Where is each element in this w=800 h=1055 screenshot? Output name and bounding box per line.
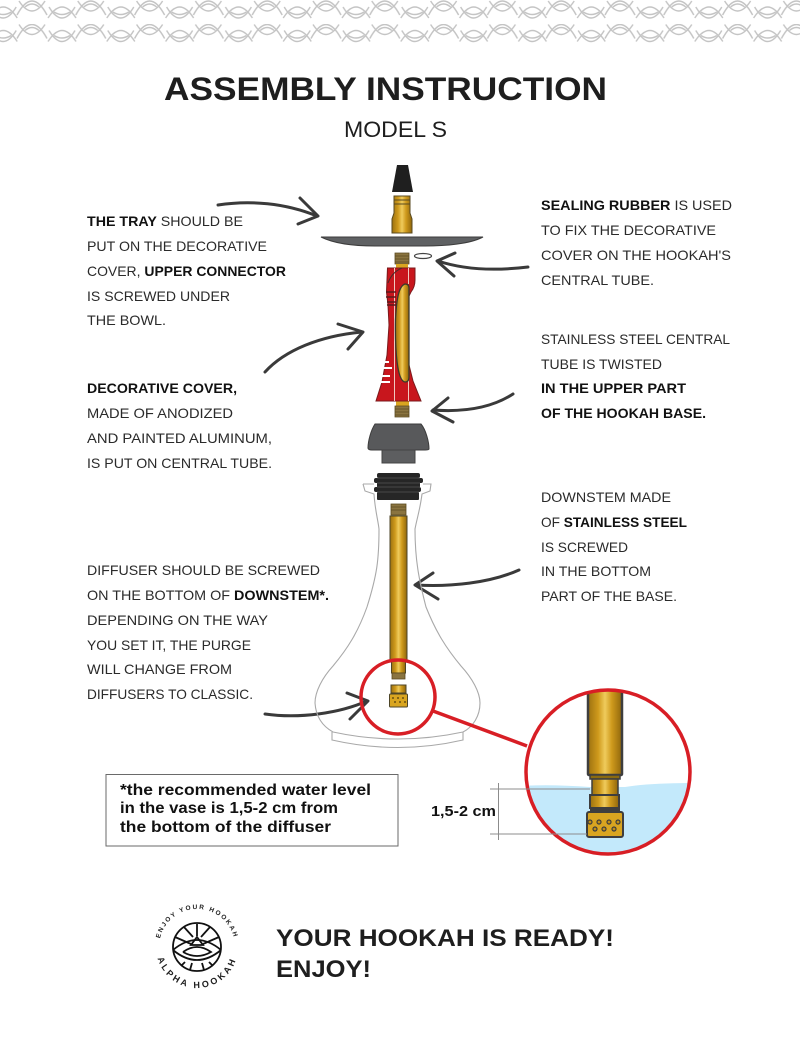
note box: the bottom of the diffuser (120, 819, 331, 836)
text block: downstem: PART OF THE BASE. (541, 588, 677, 604)
text block: diffuser: WILL CHANGE FROM (87, 661, 232, 677)
text block: the tray: IS SCREWED UNDER (87, 288, 230, 304)
text block: the tray: THE BOWL. (87, 312, 166, 328)
background pattern band (0, 0, 800, 43)
text block: central tube: STAINLESS STEEL CENTRAL (541, 331, 730, 347)
text block: diffuser: YOU SET IT, THE PURGE (87, 637, 251, 653)
small red circle (361, 660, 435, 734)
measure lines (490, 783, 590, 840)
closing message: YOUR HOOKAH IS READY! (276, 925, 614, 952)
hookah diagram (315, 165, 483, 748)
decorative cover with threads (376, 253, 421, 417)
text block: central tube: OF THE HOOKAH BASE. (541, 405, 706, 421)
diffuser (390, 685, 408, 707)
text block: decorative cover: AND PAINTED ALUMINUM, (87, 430, 272, 446)
text block: diffuser: DIFFUSERS TO CLASSIC. (87, 686, 253, 702)
text block: the tray (87, 213, 286, 328)
text block: the tray: THE TRAY SHOULD BE (87, 213, 243, 229)
text block: decorative cover: MADE OF ANODIZED (87, 405, 233, 421)
text block: diffuser: DIFFUSER SHOULD BE SCREWED (87, 562, 320, 578)
logo: ALPHA HOOKAH (158, 958, 236, 988)
note box: in the vase is 1,5-2 cm from (120, 800, 338, 817)
text block: central tube: IN THE UPPER PART (541, 380, 686, 396)
arrow: decorative cover (265, 324, 363, 372)
text block: downstem: IS SCREWED (541, 539, 628, 555)
callout connector line (433, 711, 527, 746)
magnified downstem (587, 685, 623, 837)
text block: downstem: OF STAINLESS STEEL (541, 514, 687, 530)
logo (156, 904, 238, 988)
text block: sealing rubber: COVER ON THE HOOKAH'S (541, 247, 731, 263)
title: ASSEMBLY INSTRUCTION (164, 71, 607, 107)
arrow: central tube (432, 394, 513, 422)
note box: *the recommended water level (120, 782, 371, 799)
text block: central tube: TUBE IS TWISTED (541, 356, 662, 372)
sealing ring (414, 254, 432, 258)
text block: decorative cover: IS PUT ON CENTRAL TUBE. (87, 455, 272, 471)
closing message line 2: ENJOY! (276, 956, 371, 983)
arrow: downstem (415, 570, 519, 599)
measure label: 1,5-2 cm (431, 803, 496, 820)
base connector cap (368, 424, 429, 463)
text block: decorative cover (87, 380, 272, 471)
text block: sealing rubber: CENTRAL TUBE. (541, 272, 654, 288)
subtitle: MODEL S (344, 117, 447, 142)
arrow: tray (218, 198, 318, 224)
upper connector (392, 196, 412, 233)
vase outline (315, 484, 480, 748)
text block: sealing rubber (541, 197, 732, 288)
text block: central tube (541, 331, 730, 421)
water (529, 692, 688, 852)
text block: diffuser: DEPENDING ON THE WAY (87, 612, 269, 628)
arrow: sealing rubber (437, 253, 528, 276)
bowl seal: black cone (392, 165, 413, 192)
text block: diffuser: ON THE BOTTOM OF DOWNSTEM*. (87, 587, 329, 603)
text block: sealing rubber: TO FIX THE DECORATIVE (541, 222, 716, 238)
logo emblem (173, 923, 221, 971)
logo: ENJOY YOUR HOOKAH (156, 904, 238, 938)
note box (106, 774, 398, 846)
text block: downstem: IN THE BOTTOM (541, 563, 651, 579)
arrow: diffuser (265, 693, 368, 719)
downstem (390, 504, 407, 679)
rubber grommet (374, 473, 423, 500)
text block: sealing rubber: SEALING RUBBER IS USED (541, 197, 732, 213)
text block: downstem (541, 489, 687, 604)
text block: the tray: COVER, UPPER CONNECTOR (87, 263, 286, 279)
text block: the tray: PUT ON THE DECORATIVE (87, 238, 267, 254)
tray (321, 237, 483, 246)
magnified detail circle (520, 685, 695, 860)
text block: decorative cover: DECORATIVE COVER, (87, 380, 237, 396)
text block: downstem: DOWNSTEM MADE (541, 489, 671, 505)
text block: diffuser (87, 562, 329, 702)
